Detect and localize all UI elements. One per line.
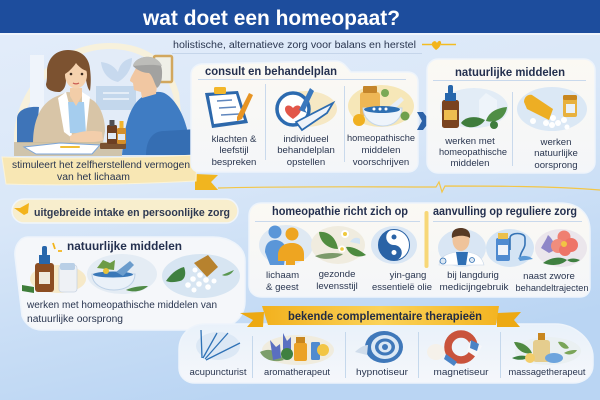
- text: werken met homeopathische middelen: natuurlijke oorsprong: [27, 314, 123, 325]
- pill: uitgebreide intake: [12, 199, 238, 223]
- text: werken met: middelen: [451, 158, 489, 169]
- text: werken met: homeopathische: [439, 147, 507, 158]
- text: individueel: individueel: [283, 134, 329, 145]
- text: gezonde: levensstijl: [316, 281, 358, 292]
- text: yin-gang: [372, 270, 432, 293]
- text: bij langdurig: bij langdurig: [447, 270, 499, 281]
- text: homeopathische: voorschrijven: [353, 157, 409, 168]
- text: homeopathische: homeopathische: [347, 133, 415, 144]
- panel: consult en behandelplan: [191, 61, 418, 172]
- text: magnetiseur: magnetiseur: [434, 367, 489, 378]
- text: bij langdurig: medicijngebruik: [440, 282, 509, 293]
- text: werken natuurlijke: natuurlijke: [534, 148, 578, 159]
- subtitle: holistische, alternatieve zorg voor balans en herstel: [173, 40, 416, 51]
- icon: bottles on tray: [100, 120, 126, 149]
- heading right: aanvulling op reguliere zorg: [433, 205, 577, 218]
- text: werken natuurlijke: oorsprong: [534, 160, 578, 171]
- divider gold: [424, 211, 428, 268]
- text: individueel: opstellen: [287, 157, 325, 168]
- text: werken natuurlijke: werken: [540, 137, 571, 148]
- text: klachten: klachten &: [212, 134, 257, 145]
- icon: doctor: [438, 228, 486, 267]
- patient: [122, 57, 187, 155]
- pill: uitgebreide intake: uitgebreide intake en persoonlijke zorg: [34, 207, 230, 219]
- chair doctor: [17, 107, 39, 143]
- ribbon: [240, 306, 521, 327]
- icon: body and mind figures: [259, 225, 313, 265]
- icon: heart target and arrow: [275, 88, 337, 130]
- text: homeopathische: middelen: [362, 145, 400, 156]
- panel: natuurlijke middelen lower: [15, 237, 245, 330]
- text: klachten: [212, 134, 257, 168]
- heading left: homeopathie richt zich op: [272, 205, 408, 218]
- icon: spiral: [355, 331, 403, 363]
- icon: medicine bottle and stethoscope: [486, 229, 534, 267]
- icon: dropper bottle and leaves: [440, 85, 508, 129]
- text: naast zwore: naast zwore: [523, 271, 575, 282]
- text: yin-gang: essentielë olie: [372, 282, 432, 293]
- text: homeopathische: [347, 133, 415, 168]
- gold pulse line: [218, 182, 600, 192]
- text: klachten: bespreken: [212, 157, 256, 168]
- text: werken met: werken met: [444, 136, 495, 147]
- icon: pills and leaves: [162, 254, 240, 298]
- icon: flower: [535, 229, 587, 267]
- heading: natuurlijke middelen: [455, 66, 565, 79]
- text: werken natuurlijke: [534, 137, 578, 171]
- text: acupuncturist: acupuncturist: [190, 367, 247, 378]
- text: lichaam: [266, 270, 299, 293]
- table: [14, 142, 122, 156]
- subtitle: [172, 40, 456, 54]
- arrow: chevron: [417, 112, 430, 130]
- picture frame: [154, 56, 172, 82]
- icon: gold heart line: [422, 41, 456, 50]
- icon: spilled pills: [517, 87, 587, 131]
- heading: bekende complementaire therapieën: [288, 311, 482, 323]
- icon: acupuncture needles: [196, 330, 240, 360]
- text: individueel: [277, 134, 335, 168]
- banner: van het lichaam: [57, 172, 130, 183]
- text: massagetherapeut: massagetherapeut: [508, 367, 586, 378]
- text: werken met homeopathische middelen: werken met homeopathische middelen van: [26, 300, 217, 311]
- text: naast zwore: [516, 271, 588, 294]
- icon: yin yang: [371, 226, 417, 264]
- icon: amber bottle and jar: [22, 246, 86, 293]
- text: yin-gang: yin-gang: [390, 270, 426, 281]
- text: klachten: leefstijl: [219, 145, 249, 156]
- heading: consult en behandelplan: [205, 65, 337, 78]
- title: wat doet een homeopaat?: [142, 6, 400, 30]
- text: bij langdurig: [440, 270, 509, 293]
- heading: natuurlijke middelen: [67, 240, 182, 253]
- panel: natuurlijke middelen top: [427, 59, 595, 173]
- banner: stimuleert het zelfherstellend vermogen: [12, 160, 190, 171]
- text: werken met homeopathische middelen: [26, 300, 217, 325]
- clipboard paper: [24, 143, 100, 154]
- icon: mortar and herbs: [348, 85, 414, 127]
- text: individueel: behandelplan: [277, 145, 335, 156]
- illustration: consultation: [14, 43, 202, 156]
- text: gezonde: gezonde: [319, 269, 355, 280]
- banner: [2, 155, 218, 190]
- icon: yellow sparks: [53, 243, 62, 251]
- doctor: [33, 50, 105, 143]
- icon: lavender and bottles: [260, 333, 334, 365]
- text: gezonde: [316, 269, 358, 292]
- icon: clipboard: [205, 87, 253, 128]
- icon: horseshoe magnet: [427, 334, 482, 366]
- panel: homeopathie en aanvulling: [249, 203, 590, 297]
- text: lichaam: & geest: [266, 282, 299, 293]
- text: werken met: [439, 136, 507, 169]
- plant and screen background: [96, 58, 136, 110]
- icon: heart: [14, 203, 29, 215]
- text: hypnotiseur: hypnotiseur: [356, 367, 409, 378]
- chair patient: [146, 129, 202, 155]
- text: aromatherapeut: aromatherapeut: [264, 367, 330, 378]
- icon: leaves and flowers: [311, 226, 366, 264]
- text: lichaam: lichaam: [266, 270, 299, 281]
- icon: massage oil and flower: [512, 333, 581, 365]
- panel: therapies: [179, 324, 593, 383]
- header bar: [0, 0, 600, 35]
- text: naast zwore: behandeltrajecten: [516, 283, 588, 294]
- icon: mortar and herbs: [87, 254, 157, 294]
